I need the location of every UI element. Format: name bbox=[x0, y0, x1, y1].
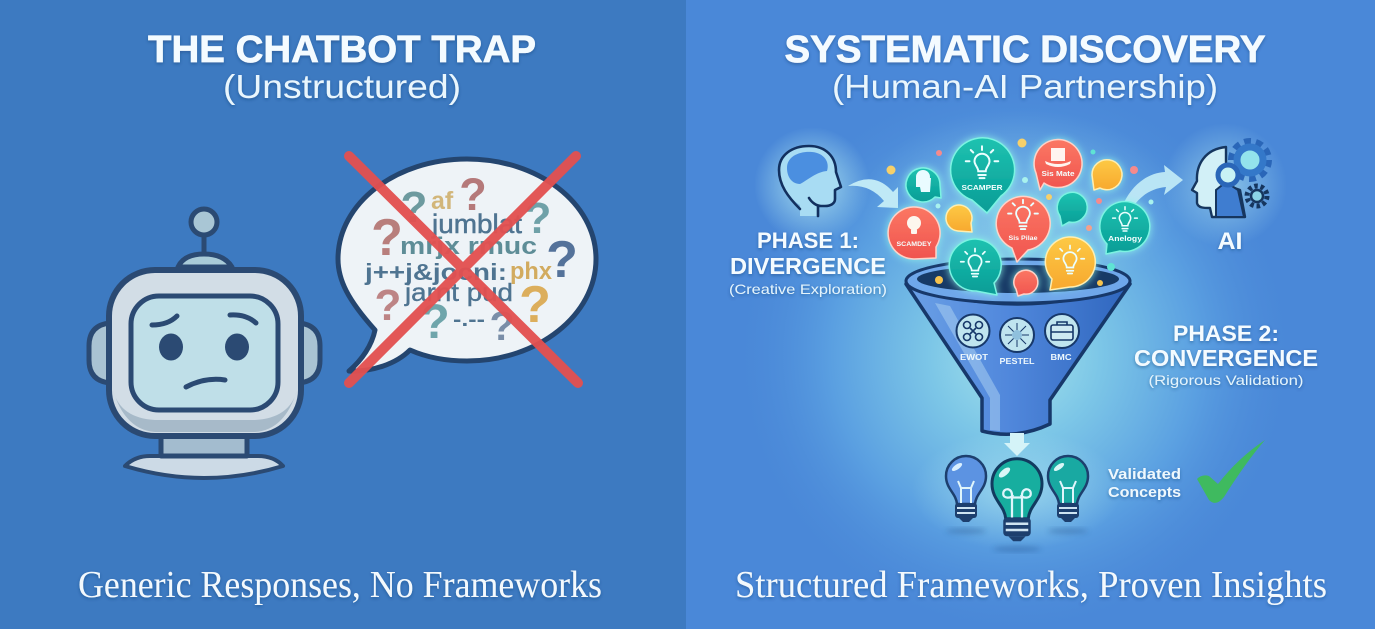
question marks: ? bbox=[546, 231, 578, 289]
bubble: yellow top bbox=[1092, 160, 1122, 190]
question marks: ? bbox=[525, 194, 551, 243]
bulb: left bbox=[946, 456, 986, 522]
jumbled letters: phx bbox=[510, 258, 553, 285]
question marks bbox=[371, 169, 578, 349]
question marks: ? bbox=[489, 303, 515, 349]
validated concepts label: Validated bbox=[1108, 467, 1181, 483]
question marks: ? bbox=[375, 281, 401, 330]
framework labels: BMC bbox=[1050, 352, 1072, 362]
icon: confused robot bbox=[89, 209, 320, 478]
jumbled letters: j++j&jocni: bbox=[364, 259, 507, 285]
bubble: hat bbox=[1034, 140, 1082, 190]
icon: white bulb bbox=[907, 216, 921, 234]
panel: systematic discovery bbox=[686, 0, 1375, 629]
validated concepts label bbox=[1108, 467, 1181, 501]
bubble labels: SCAMDEY bbox=[896, 241, 932, 248]
question marks: ? bbox=[459, 169, 487, 220]
idea bubbles bbox=[888, 138, 1150, 296]
icon: top hat bbox=[1045, 148, 1071, 167]
validated concepts label: Concepts bbox=[1108, 485, 1181, 501]
ai arrow bbox=[1122, 165, 1183, 207]
funnel body bbox=[906, 284, 1130, 434]
bubble labels: Sis Pilae bbox=[1008, 235, 1038, 242]
bubble labels: Anelogy bbox=[1108, 234, 1143, 243]
bulb: centre bbox=[992, 459, 1042, 541]
bubble: analogy bbox=[1100, 201, 1150, 254]
question marks: ? bbox=[371, 209, 403, 267]
bubble: scamper bbox=[951, 138, 1015, 213]
icon: pestel bbox=[1000, 318, 1034, 352]
bubble labels: Sis Mate bbox=[1042, 171, 1075, 178]
phase 2 label bbox=[1134, 321, 1318, 388]
ai label: AI bbox=[1218, 228, 1242, 255]
jumbled letters bbox=[364, 187, 553, 331]
icon: human head bbox=[779, 146, 841, 216]
jumbled letters: jumblat bbox=[431, 209, 523, 239]
icon: briefcase bbox=[1045, 314, 1079, 348]
validated bulbs bbox=[946, 456, 1088, 552]
bubble: scamdey bbox=[888, 207, 940, 259]
framework labels: PESTEL bbox=[1000, 356, 1034, 366]
phase 1 label: PHASE 1: bbox=[757, 228, 859, 253]
bubble: yellow bottom bbox=[1045, 237, 1095, 290]
bubble: teal plain bbox=[1057, 192, 1087, 226]
phase 2 label: (Rigorous Validation) bbox=[1148, 372, 1304, 388]
jumbled letters: mrjx rmuc bbox=[400, 233, 537, 260]
bulb shadows bbox=[946, 528, 1088, 552]
bubble: brain bbox=[906, 168, 941, 202]
bubble: red middle bbox=[996, 196, 1050, 262]
bubble labels: SCAMPER bbox=[962, 183, 1003, 192]
arrow: head to ideas bbox=[848, 179, 898, 208]
subheading: unstructured: (Unstructured) bbox=[223, 68, 461, 105]
funnel bbox=[906, 259, 1130, 434]
jumbled letters: jarnt pud bbox=[404, 279, 513, 307]
bubble contents bbox=[896, 146, 1143, 277]
bubble: teal bottom bbox=[949, 239, 1001, 295]
bubble: red small bbox=[1014, 270, 1038, 296]
phase 2 label: PHASE 2: bbox=[1173, 321, 1279, 346]
bubble: yellow small bbox=[946, 205, 972, 232]
question marks: ? bbox=[519, 276, 551, 334]
green check mark bbox=[1197, 440, 1265, 503]
jumbled letters: -.-- bbox=[453, 309, 485, 331]
framework labels: EWOT bbox=[960, 352, 989, 362]
icon: ai head with gears bbox=[1192, 142, 1268, 217]
jumbled letters: af bbox=[431, 187, 454, 215]
question marks: ? bbox=[401, 183, 427, 232]
phase 1 label: DIVERGENCE bbox=[730, 253, 886, 279]
funnel rim bbox=[906, 259, 1130, 303]
speech bubble with jumbled text bbox=[338, 159, 596, 371]
heading: the chatbot trap: THE CHATBOT TRAP bbox=[148, 29, 536, 71]
red x bbox=[349, 156, 578, 383]
phase 2 label: CONVERGENCE bbox=[1134, 345, 1318, 371]
down arrow bbox=[1004, 433, 1030, 456]
phase 1 label: (Creative Exploration) bbox=[729, 281, 887, 297]
framework icons bbox=[956, 314, 1079, 366]
bubble labels bbox=[896, 171, 1143, 248]
sparkle dots bbox=[886, 138, 1154, 286]
subheading: human-ai partnership: (Human-AI Partnership) bbox=[832, 68, 1218, 105]
caption: generic responses: Generic Responses, No Frameworks bbox=[78, 564, 602, 606]
caption: structured frameworks: Structured Frameworks, Proven Insights bbox=[735, 564, 1327, 606]
icon: brain in bubble bbox=[916, 170, 931, 192]
phase 1 label bbox=[729, 228, 887, 297]
question marks: ? bbox=[420, 296, 450, 349]
bulb: right bbox=[1048, 456, 1088, 522]
heading: systematic discovery: SYSTEMATIC DISCOVERY bbox=[784, 29, 1266, 71]
panel: chatbot trap bbox=[0, 0, 686, 629]
icon: swot bbox=[956, 314, 990, 348]
framework labels bbox=[960, 352, 1072, 366]
